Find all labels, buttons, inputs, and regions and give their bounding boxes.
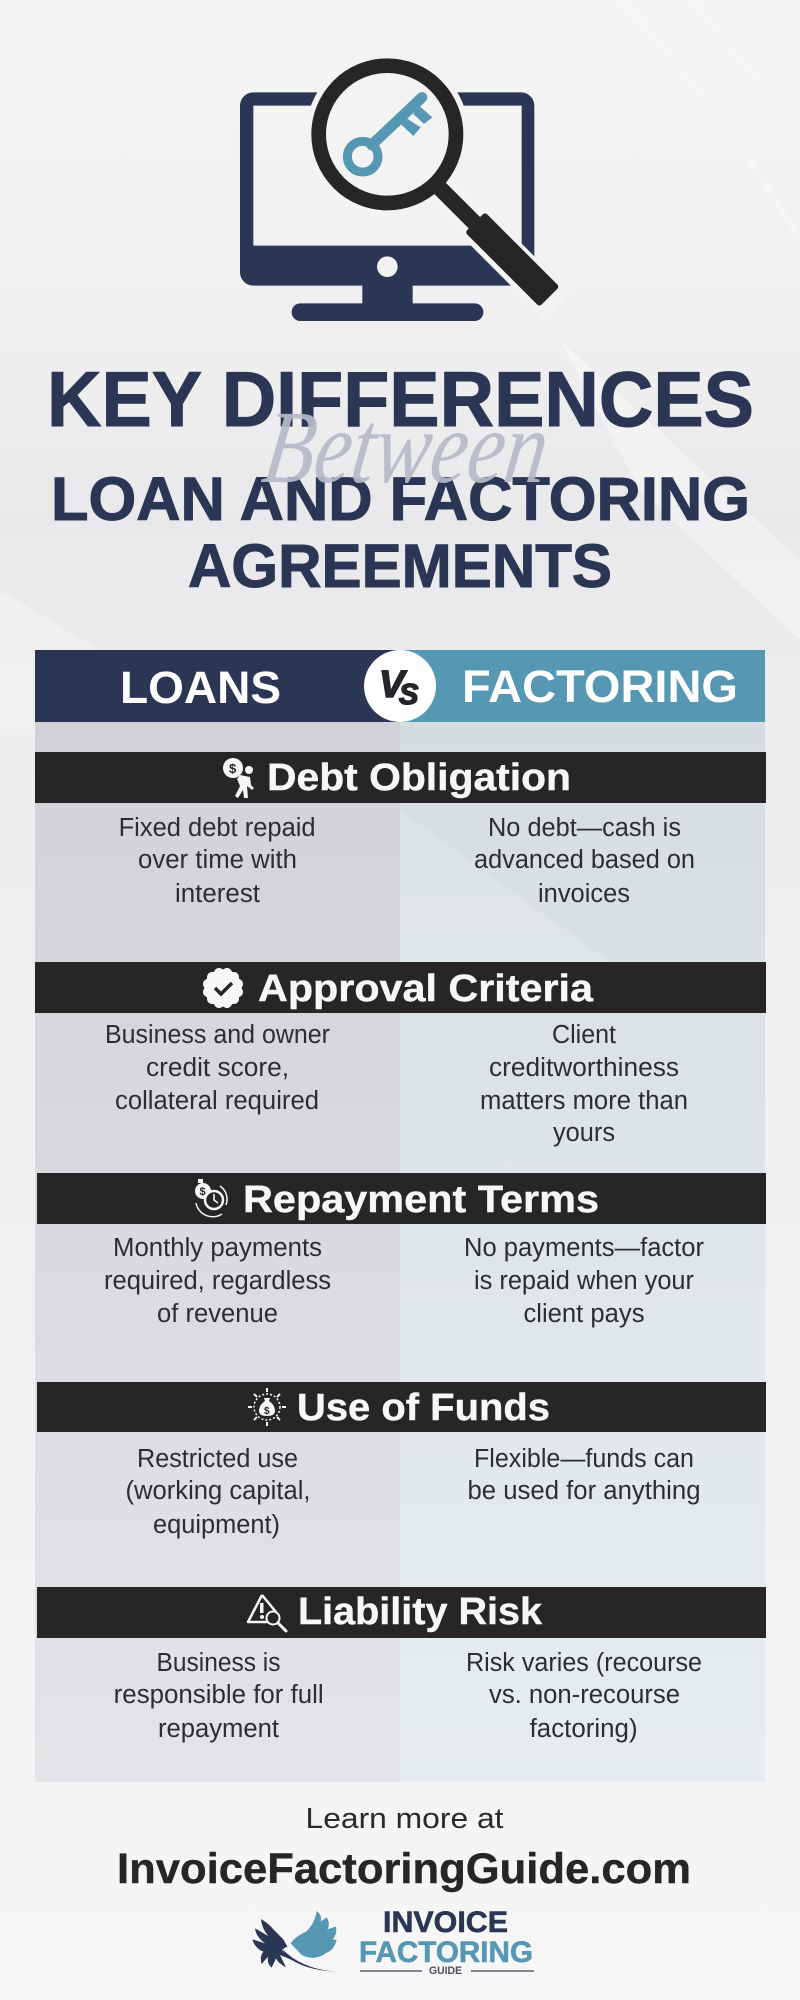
text: loans approval criteria: Business and owner [105, 1021, 330, 1049]
text: loans approval criteria: credit score, [146, 1054, 289, 1082]
text: factoring use of funds: Flexible—funds can [474, 1445, 694, 1473]
text: loans debt obligation: Fixed debt repaid [119, 814, 316, 842]
icon: check badge [201, 966, 245, 1010]
icon: money bag with rays: $ [264, 1406, 270, 1417]
header bar: loans vs factoring: FACTORING [462, 661, 738, 712]
text: loans use of funds: Restricted use [137, 1445, 298, 1473]
icon: stopwatch and coin: $ [200, 1186, 206, 1198]
text: loans liability risk: repayment [158, 1715, 279, 1743]
text: factoring repayment terms [464, 1234, 705, 1328]
logo: invoice factoring guide: GUIDE [429, 1965, 462, 1977]
text: factoring use of funds: be used for anything [468, 1477, 700, 1505]
text: loans repayment terms: required, regardless [104, 1267, 331, 1295]
text: factoring repayment terms: is repaid when your [474, 1267, 695, 1295]
header bar: loans vs factoring: S [399, 679, 419, 711]
text: factoring liability risk: factoring) [530, 1715, 638, 1743]
text: factoring use of funds [468, 1445, 700, 1505]
text: loans use of funds: (working capital, [126, 1477, 310, 1505]
icon: money bag with rays [248, 1388, 286, 1426]
text: loans debt obligation [119, 814, 316, 908]
footer: website: InvoiceFactoringGuide.com [117, 1845, 691, 1893]
icon: key [347, 97, 432, 172]
text: factoring debt obligation [474, 814, 695, 908]
text: factoring approval criteria: Client [552, 1021, 616, 1049]
icon: stopwatch and coin [195, 1179, 227, 1217]
title: LOAN AND FACTORING [51, 465, 750, 533]
text: factoring debt obligation: invoices [538, 880, 630, 908]
text: loans debt obligation: interest [175, 880, 260, 908]
text: factoring approval criteria [480, 1021, 688, 1147]
text: loans approval criteria: collateral required [115, 1087, 319, 1115]
row: debt obligation: Debt Obligation [267, 757, 571, 799]
comparison body panels [35, 722, 765, 1782]
text: factoring approval criteria: yours [553, 1119, 615, 1147]
header bar: loans vs factoring: V [379, 664, 404, 706]
header bar: loans vs factoring: LOANS [120, 662, 281, 713]
text: factoring liability risk: vs. non-recourse [489, 1681, 680, 1709]
text: loans repayment terms: Monthly payments [113, 1234, 322, 1262]
text: factoring debt obligation: No debt—cash is [488, 814, 681, 842]
text: loans repayment terms: of revenue [157, 1300, 278, 1328]
text: factoring repayment terms: No payments—factor [464, 1234, 705, 1262]
row: debt obligation [35, 752, 766, 803]
text: factoring approval criteria: matters more than [480, 1087, 688, 1115]
logo: invoice factoring guide [252, 1906, 534, 1977]
hero icon: monitor with magnifier over key [240, 53, 559, 321]
script word: Between: Between [257, 389, 556, 505]
icon: person carrying coin [223, 758, 254, 798]
row: repayment terms: Repayment Terms [243, 1179, 599, 1221]
text: factoring repayment terms: client pays [524, 1300, 644, 1328]
header bar: loans vs factoring [35, 650, 765, 722]
title: KEY DIFFERENCES [47, 355, 754, 443]
text: loans liability risk: responsible for full [114, 1681, 324, 1709]
row: use of funds [37, 1382, 766, 1432]
icon: person carrying coin: $ [229, 761, 237, 776]
text: loans use of funds: equipment) [153, 1511, 280, 1539]
logo: invoice factoring guide: FACTORING [359, 1936, 533, 1969]
text: loans approval criteria [105, 1021, 330, 1115]
text: loans repayment terms [104, 1234, 331, 1328]
text: factoring approval criteria: creditworthiness [489, 1054, 679, 1082]
row: approval criteria [35, 962, 766, 1013]
text: loans use of funds [126, 1445, 310, 1539]
text: loans debt obligation: over time with [138, 846, 297, 874]
row: repayment terms [37, 1173, 766, 1224]
icon: eagle wings [252, 1911, 337, 1972]
footer: learn more: Learn more at [306, 1803, 504, 1835]
row: liability risk: Liability Risk [298, 1591, 543, 1633]
row: approval criteria: Approval Criteria [258, 968, 594, 1010]
logo: invoice factoring guide: INVOICE [383, 1906, 508, 1939]
row: liability risk [37, 1587, 766, 1638]
monitor [240, 92, 534, 321]
text: factoring debt obligation: advanced based on [474, 846, 695, 874]
text: factoring liability risk: Risk varies (recourse [466, 1649, 702, 1677]
magnifier [306, 53, 559, 307]
icon: warning triangle with magnifier [248, 1595, 286, 1631]
title [47, 355, 754, 600]
text: factoring liability risk [466, 1649, 702, 1743]
text: loans liability risk [114, 1649, 324, 1743]
title: AGREEMENTS [188, 532, 612, 600]
row: use of funds: Use of Funds [297, 1387, 550, 1429]
text: loans liability risk: Business is [156, 1649, 280, 1677]
